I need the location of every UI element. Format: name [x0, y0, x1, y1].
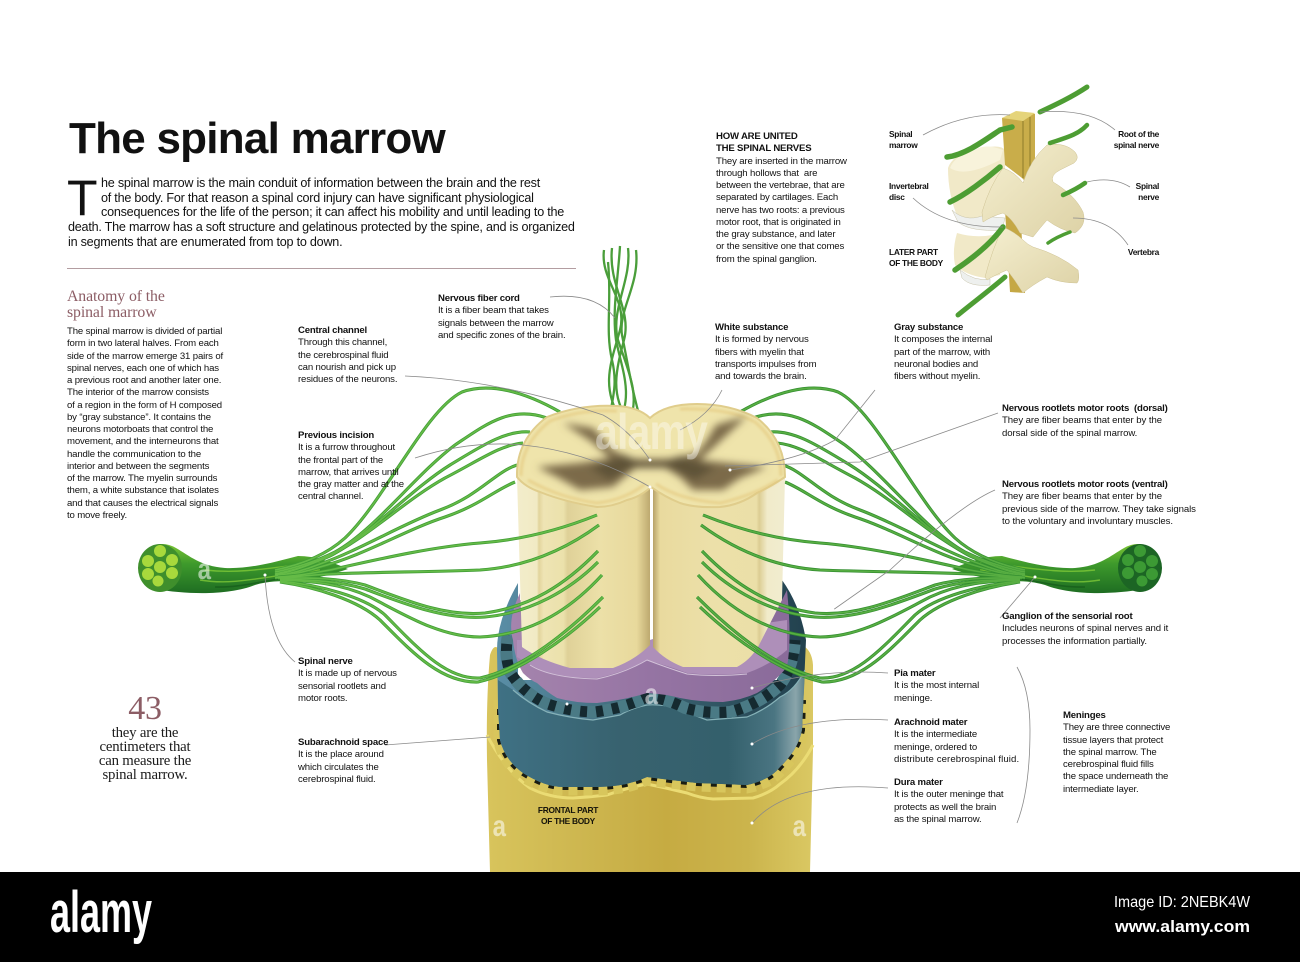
small label: vertebra: Vertebra [1128, 247, 1159, 257]
small label: invertebral disc: disc [889, 192, 905, 202]
small label: spinal marrow: Spinal [889, 129, 912, 139]
label: central channel: Through this channel, [298, 337, 387, 348]
label: ganglion: Ganglion of the sensorial root [1002, 611, 1132, 622]
label: white substance: White substance [715, 322, 788, 333]
small label: later part of the body: LATER PART [889, 247, 938, 257]
label: dura mater: It is the outer meninge that [894, 789, 1003, 800]
sidebar text: The spinal marrow is divided of partial [67, 326, 222, 337]
watermark: alamy [595, 404, 707, 460]
label: nervous fiber cord: and specific zones of the brain. [438, 330, 565, 341]
spinal nerve, left [138, 544, 348, 593]
spinal nerve, right [952, 544, 1162, 593]
spinal cord cross-section [517, 404, 785, 507]
label: ventral rootlets [1002, 479, 1196, 527]
sidebar text: handle the communication to the [67, 448, 201, 460]
label: meninges [1063, 710, 1170, 794]
label: spinal nerve: Spinal nerve [298, 656, 353, 667]
label: how nerves unite: separated by cartilages. Each [716, 192, 838, 203]
label: meninges: the space underneath the [1063, 771, 1168, 782]
sidebar text: and that causes the electrical signals [67, 498, 218, 508]
label: ventral rootlets: to the voluntary and involuntary muscles. [1002, 516, 1173, 527]
label: pia mater: It is the most internal [894, 680, 979, 691]
sidebar heading: Anatomy of the [67, 288, 165, 305]
label: central channel [298, 325, 397, 385]
label: meninges: They are three connective [1063, 722, 1170, 733]
label: central channel: Central channel [298, 325, 367, 336]
small label: root of the spinal nerve: spinal nerve [1114, 140, 1159, 150]
label: how nerves unite: from the spinal ganglion. [716, 254, 817, 264]
intro paragraph: in segments that are enumerated from top to down. [68, 235, 342, 249]
sidebar text: to move freely. [67, 510, 127, 521]
statistic: 43 centimeters: they are the [112, 725, 178, 741]
label: central channel: can nourish and pick up [298, 362, 396, 373]
ventral rootlets, right [697, 515, 1022, 682]
label: previous incision: the frontal part of the [298, 454, 383, 466]
label: arachnoid mater: distribute cerebrospinal fluid. [894, 754, 1019, 765]
nervous fiber cord [604, 246, 640, 425]
label: ganglion: Includes neurons of spinal nerves and it [1002, 623, 1168, 634]
sidebar heading [67, 288, 165, 320]
small label: later part of the body [889, 247, 943, 268]
label: meninges: intermediate layer. [1063, 784, 1139, 794]
label: how nerves unite: the gray substance, and later [716, 229, 835, 240]
footer bar [0, 872, 1300, 962]
label: arachnoid mater [894, 717, 1019, 765]
label: spinal nerve: motor roots. [298, 693, 347, 704]
sidebar text: interior and between the segments [67, 461, 209, 472]
statistic: 43 centimeters: can measure the [99, 753, 191, 769]
label: nervous fiber cord [438, 293, 565, 341]
statistic: 43 centimeters: 43 [128, 690, 162, 727]
label: previous incision: Previous incision [298, 430, 374, 441]
small label: spinal marrow: marrow [889, 140, 917, 150]
label: previous incision [298, 430, 404, 502]
label: how nerves unite: HOW ARE UNITED [716, 131, 798, 142]
sidebar text: them, a white substance that isolates [67, 485, 219, 496]
label: arachnoid mater: meninge, ordered to [894, 742, 977, 752]
label: previous incision: the gray matter and at the [298, 479, 404, 490]
label: subarachnoid space: cerebrospinal fluid. [298, 774, 376, 785]
sidebar text: side of the marrow emerge 31 pairs of [67, 350, 223, 362]
small label: frontal part of the body [538, 805, 598, 826]
dorsal rootlets, right [740, 388, 1025, 578]
intro paragraph: of the body. For that reason a spinal cord injury can have significant physiological [101, 191, 534, 205]
watermark: a [645, 678, 658, 711]
small label: invertebral disc [889, 181, 929, 202]
label: white substance: fibers with myelin that [715, 346, 804, 358]
label: dura mater [894, 777, 1004, 825]
label: spinal nerve [298, 656, 397, 704]
label: how nerves unite: motor root, that is originated in [716, 217, 841, 228]
statistic: 43 centimeters: centimeters that [100, 739, 190, 755]
label: dura mater: Dura mater [894, 777, 943, 788]
small label: root of the spinal nerve [1114, 129, 1159, 150]
label: dorsal rootlets: Nervous rootlets motor roots (dorsal) [1002, 403, 1168, 414]
label: ganglion [1002, 611, 1168, 646]
label: central channel: the cerebrospinal fluid [298, 350, 388, 360]
statistic: 43 centimeters [99, 690, 191, 783]
sidebar text [67, 326, 224, 521]
label: dorsal rootlets [1002, 403, 1168, 438]
sidebar text: movement, and the interneurons that [67, 436, 219, 447]
footer bar: alamy [50, 880, 152, 945]
label: subarachnoid space: Subarachnoid space [298, 737, 388, 748]
sidebar heading: spinal marrow [67, 304, 157, 320]
label: gray substance: It composes the internal [894, 334, 992, 345]
intro paragraph: he spinal marrow is the main conduit of information between the brain and the rest [101, 176, 540, 190]
small label: later part of the body: OF THE BODY [889, 258, 943, 268]
label: meninges: Meninges [1063, 710, 1106, 721]
label: meninges: cerebrospinal fluid fills [1063, 759, 1154, 770]
label: gray substance [894, 322, 992, 382]
label: subarachnoid space [298, 737, 388, 785]
small label: spinal nerve: Spinal [1136, 181, 1159, 191]
label: white substance: and towards the brain. [715, 371, 807, 382]
label: how nerves unite: THE SPINAL NERVES [716, 143, 811, 154]
spinal nerves [947, 87, 1087, 315]
intro paragraph: consequences for the life of the person; it can affect his mobility and until leading to the [101, 205, 564, 219]
intro paragraph: T [67, 170, 97, 226]
label: gray substance: Gray substance [894, 322, 963, 333]
divider rule [67, 268, 576, 270]
watermark: a [493, 810, 506, 843]
label: dorsal rootlets: They are fiber beams that enter by the [1002, 415, 1162, 426]
label: nervous fiber cord: Nervous fiber cord [438, 293, 520, 304]
label: pia mater: Pia mater [894, 668, 935, 679]
dorsal rootlets, left [275, 388, 560, 578]
label: gray substance: neuronal bodies and [894, 359, 978, 370]
statistic: 43 centimeters: spinal marrow. [102, 767, 188, 783]
label: white substance [715, 322, 816, 382]
label: how nerves unite: between the vertebrae, that are [716, 180, 845, 191]
label: previous incision: marrow, that arrives until [298, 467, 399, 478]
label: pia mater [894, 668, 979, 704]
label: gray substance: fibers without myelin. [894, 371, 980, 382]
sidebar text: a previous root and another later one. [67, 375, 221, 386]
small label: spinal nerve [1136, 181, 1159, 202]
vertebral bodies [948, 146, 1005, 278]
ventral rootlets, left [278, 515, 603, 682]
spinal marrow core [1002, 112, 1035, 183]
sidebar text: The interior of the marrow consists [67, 387, 209, 398]
label: previous incision: It is a furrow throughout [298, 442, 395, 453]
label: ventral rootlets: previous side of the marrow. They take signals [1002, 504, 1196, 514]
vertebral column illustration [947, 87, 1087, 315]
label: dorsal rootlets: dorsal side of the spinal marrow. [1002, 428, 1137, 438]
sidebar text: neurons motorboats that control the [67, 424, 213, 435]
title: The spinal marrow [69, 114, 445, 163]
intervertebral discs [952, 210, 1005, 285]
label: arachnoid mater: Arachnoid mater [894, 717, 967, 728]
small label: frontal part of the body: FRONTAL PART [538, 805, 598, 815]
label: spinal nerve: It is made up of nervous [298, 668, 397, 679]
label: arachnoid mater: It is the intermediate [894, 729, 977, 740]
label: pia mater: meninge. [894, 692, 932, 704]
label: how nerves unite: through hollows that are [716, 168, 817, 179]
label: gray substance: part of the marrow, with [894, 346, 990, 358]
label: dura mater: protects as well the brain [894, 802, 996, 812]
label: how nerves unite: They are inserted in the marrow [716, 156, 847, 166]
label: how nerves unite [716, 131, 847, 264]
label: meninges: tissue layers that protect [1063, 734, 1163, 746]
label: how nerves unite: nerve has two roots: a previous [716, 204, 845, 216]
vertebral processes [982, 144, 1084, 237]
watermark: a [793, 810, 806, 843]
sidebar text: of a region in the form of H composed [67, 400, 222, 410]
label: ventral rootlets: Nervous rootlets motor roots (ventral) [1002, 479, 1168, 490]
label: subarachnoid space: which circulates the [298, 762, 379, 772]
small label: frontal part of the body: OF THE BODY [541, 816, 595, 826]
sidebar text: by “gray substance”. It contains the [67, 412, 211, 423]
label: how nerves unite: or the sensitive one that comes [716, 241, 844, 252]
label: meninges: the spinal marrow. The [1063, 747, 1157, 758]
pia mater [511, 590, 790, 703]
label: nervous fiber cord: It is a fiber beam that takes [438, 305, 549, 316]
intro paragraph [67, 170, 575, 249]
label: nervous fiber cord: signals between the marrow [438, 318, 554, 328]
footer bar: www.alamy.com [1114, 917, 1250, 936]
label: central channel: residues of the neurons. [298, 374, 397, 385]
dura mater [487, 645, 813, 872]
label: subarachnoid space: It is the place around [298, 749, 384, 760]
watermark: a [198, 553, 211, 586]
label: spinal nerve: sensorial rootlets and [298, 680, 386, 692]
label: dura mater: as the spinal marrow. [894, 814, 982, 825]
footer bar: Image ID: 2NEBK4W [1114, 894, 1251, 911]
label: previous incision: central channel. [298, 491, 363, 502]
small label: spinal marrow [889, 129, 918, 150]
label: ganglion: processes the information partially. [1002, 636, 1147, 646]
label: white substance: transports impulses from [715, 359, 816, 370]
small label: root of the spinal nerve: Root of the [1118, 129, 1159, 139]
sidebar text: form in two lateral halves. From each [67, 338, 219, 349]
label: white substance: It is formed by nervous [715, 334, 809, 345]
leader lines and anchor dots [265, 111, 1130, 823]
arachnoid mater [497, 580, 806, 787]
gray substance [537, 416, 767, 490]
sidebar text: spinal nerves, each one of which has [67, 363, 219, 374]
sidebar text: of the marrow. The myelin surrounds [67, 473, 217, 484]
small label: invertebral disc: Invertebral [889, 181, 929, 191]
spinal cord columns [517, 477, 785, 668]
intro paragraph: death. The marrow has a soft structure and gelatinous protected by the spine, and is organized [68, 220, 575, 234]
label: ventral rootlets: They are fiber beams that enter by the [1002, 491, 1162, 502]
small label: spinal nerve: nerve [1138, 192, 1159, 202]
